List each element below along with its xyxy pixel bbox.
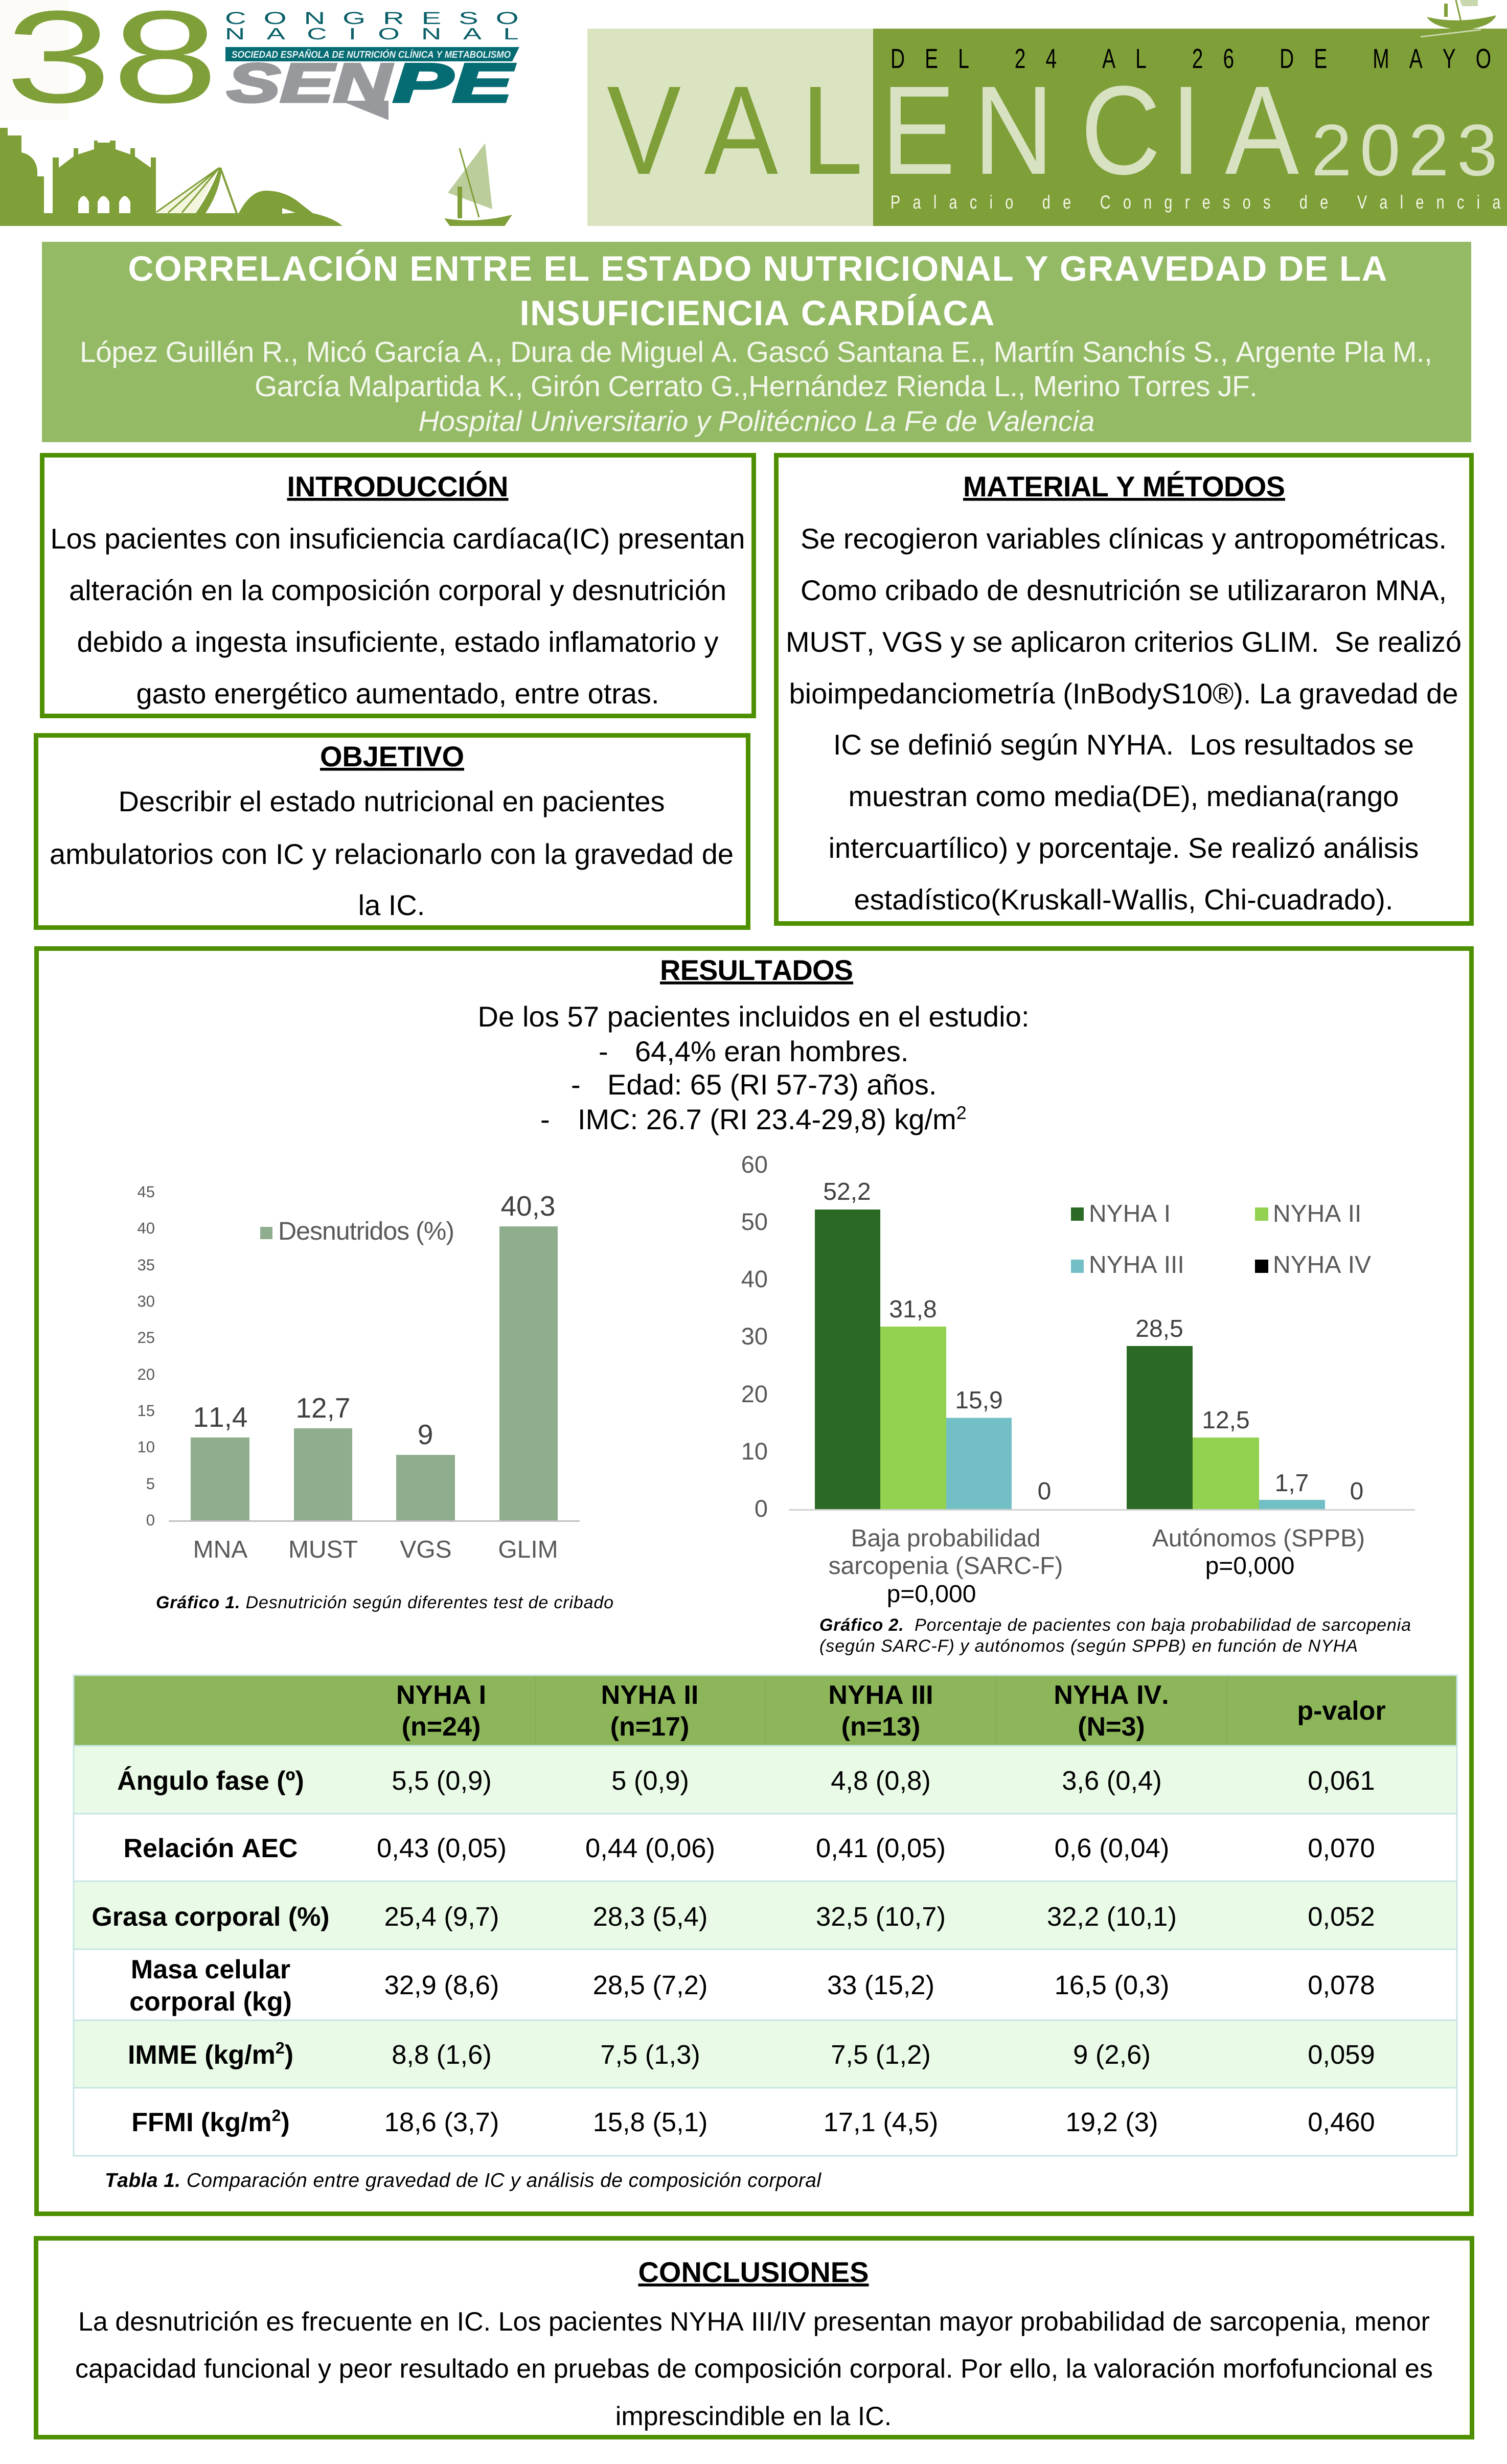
table: composición corporal [74, 1675, 1457, 2156]
row: FFMI: 17,1 (4,5) [824, 2107, 938, 2137]
caption: tabla 1: Tabla 1. Comparación entre gravedad de IC y análisis de composición corporal [105, 2170, 821, 2192]
row: masa celular: corporal (kg) [129, 1987, 292, 2017]
data labels: 28,5 [1135, 1315, 1183, 1342]
dark panel [873, 29, 1507, 226]
row: relación AEC: 0,44 (0,06) [585, 1833, 715, 1863]
y axis labels: 20 [741, 1380, 768, 1407]
row: FFMI: 19,2 (3) [1066, 2107, 1158, 2137]
row: grasa corporal: 32,2 (10,1) [1047, 1902, 1177, 1932]
row: FFMI: FFMI (kg/m [131, 2108, 272, 2137]
body text: intercuartílico) y porcentaje. Se realizó análisis [829, 832, 1419, 864]
data labels: 9 [418, 1419, 433, 1450]
y axis labels: 35 [138, 1256, 155, 1274]
header banner [0, 0, 1507, 226]
body text: muestran como media(DE), mediana(rango [849, 780, 1399, 812]
y axis labels [741, 1151, 768, 1522]
faint photo background [0, 0, 69, 120]
table header: (n=17) [610, 1712, 689, 1742]
row: IMME: 0,059 [1308, 2040, 1375, 2070]
row: IMME: ) [285, 2040, 293, 2070]
table header: NYHA III [828, 1680, 933, 1710]
body text: La desnutrición es frecuente en IC. Los pacientes NYHA III/IV presentan mayor probabilidad de sarcopenia, menor [78, 2307, 1430, 2337]
body text: IC se definió según NYHA. Los resultados se [833, 728, 1414, 761]
row: relación AEC: 0,6 (0,04) [1055, 1833, 1169, 1863]
row: IMME [128, 2039, 1375, 2070]
data labels: 31,8 [889, 1296, 937, 1323]
y axis labels: 25 [138, 1329, 155, 1347]
y axis labels: 20 [138, 1365, 155, 1383]
y axis labels: 45 [138, 1183, 155, 1201]
row: IMME: 7,5 (1,3) [600, 2040, 700, 2070]
heading: RESULTADOS [660, 954, 853, 986]
body text: MUST, VGS y se aplicaron criterios GLIM. Se realizó [786, 626, 1462, 658]
row: ángulo fase [117, 1766, 1375, 1796]
body text [50, 785, 734, 921]
y axis labels: 10 [138, 1438, 155, 1456]
row: masa celular [129, 1955, 1375, 2017]
table header: (n=24) [402, 1712, 481, 1742]
panel: objetivo [36, 735, 748, 927]
affiliation: Hospital Universitario y Politécnico La Fe de Valencia [418, 405, 1095, 437]
society ribbon [225, 47, 519, 61]
y axis labels: 5 [146, 1475, 155, 1493]
authors: López Guillén R., Micó García A., Dura de Miguel A. Gascó Santana E., Martín Sanchís S., Argente Pla M., [80, 336, 1432, 369]
caption: gráfico 2: Gráfico 2. Porcentaje de pacientes con baja probabilidad de sarcopenia [819, 1615, 1411, 1635]
row: masa celular: 32,9 (8,6) [384, 1970, 499, 2000]
authors: García Malpartida K., Girón Cerrato G.,Hernández Rienda L., Merino Torres JF. [255, 370, 1258, 403]
body text: la IC. [358, 889, 425, 921]
row: masa celular: 0,078 [1308, 1970, 1375, 2000]
summary text [477, 1000, 1030, 1135]
legend: NYHA IV [1273, 1251, 1371, 1279]
VALENCIA word: ENCIA [881, 60, 1299, 201]
heading: CONCLUSIONES [638, 2256, 869, 2288]
row: IMME: 9 (2,6) [1073, 2040, 1151, 2070]
row: IMME: IMME (kg/m [128, 2040, 276, 2070]
sailboat right [1421, 0, 1496, 37]
data labels: 0 [1350, 1478, 1363, 1505]
summary text: - [540, 1103, 550, 1135]
body text: alteración en la composición corporal y desnutrición [69, 574, 726, 606]
y axis labels: 40 [741, 1265, 768, 1292]
heading: OBJETIVO [320, 740, 464, 772]
body text: Describir el estado nutricional en pacientes [119, 785, 665, 817]
legend: Desnutridos (%) [278, 1217, 454, 1245]
data labels: 12,5 [1202, 1407, 1250, 1434]
row: IMME: 7,5 (1,2) [831, 2040, 931, 2070]
data labels: 0 [1038, 1478, 1051, 1505]
row backgrounds [74, 1746, 1457, 2088]
body text: debido a ingesta insuficiente, estado inflamatorio y [77, 626, 719, 658]
category labels: p=0,000 [887, 1581, 976, 1608]
summary text: Edad: 65 (RI 57-73) años. [607, 1068, 937, 1101]
legend: NYHA III [1089, 1251, 1184, 1279]
caption: gráfico 1: Gráfico 1. Desnutrición según diferentes test de cribado [156, 1593, 613, 1612]
body text: Se recogieron variables clínicas y antropométricas. [801, 522, 1447, 555]
row: IMME: 2 [276, 2039, 285, 2057]
row: grasa corporal: 32,5 (10,7) [816, 1902, 946, 1932]
body text [786, 522, 1462, 916]
row: relación AEC: 0,43 (0,05) [377, 1833, 507, 1863]
summary text: - [571, 1068, 581, 1101]
y axis labels [138, 1183, 155, 1529]
data labels: 40,3 [500, 1190, 556, 1222]
row: FFMI: 0,460 [1308, 2107, 1375, 2137]
category labels: MNA [193, 1536, 247, 1563]
category labels: Autónomos (SPPB) [1152, 1525, 1365, 1552]
body text: Los pacientes con insuficiencia cardíaca(IC) presentan [50, 522, 745, 555]
category labels [829, 1525, 1365, 1608]
bars [815, 1210, 1325, 1510]
VALENCIA word [607, 60, 1299, 201]
y axis labels: 0 [755, 1495, 768, 1522]
panel: resultados [37, 949, 1471, 2214]
row: masa celular: 16,5 (0,3) [1055, 1970, 1169, 2000]
body text: estadístico(Kruskall-Wallis, Chi-cuadrado). [854, 883, 1394, 916]
y axis labels: 30 [741, 1322, 768, 1350]
row: ángulo fase: 5,5 (0,9) [392, 1766, 492, 1796]
summary text: 2 [956, 1102, 967, 1123]
category labels: p=0,000 [1205, 1553, 1294, 1580]
row: relación AEC: 0,41 (0,05) [816, 1833, 946, 1863]
category labels: GLIM [498, 1536, 558, 1563]
SENPE logo: PE [393, 52, 515, 113]
body text [75, 2307, 1433, 2431]
panel: material y métodos [776, 455, 1471, 923]
summary text: De los 57 pacientes incluidos en el estudio: [477, 1000, 1030, 1033]
row: FFMI: ) [281, 2108, 290, 2137]
row: relación AEC [124, 1833, 1375, 1863]
y axis labels: 15 [138, 1402, 155, 1420]
data labels: 11,4 [193, 1401, 248, 1433]
title: CORRELACIÓN ENTRE EL ESTADO NUTRICIONAL Y GRAVEDAD DE LA [128, 249, 1387, 288]
congreso nacional wordmark: CONGRESO [225, 9, 519, 28]
row: FFMI: 2 [272, 2106, 281, 2125]
summary text: 64,4% eran hombres. [635, 1035, 908, 1067]
category labels: sarcopenia (SARC-F) [829, 1553, 1063, 1580]
category labels: VGS [400, 1536, 452, 1563]
category labels: MUST [288, 1536, 358, 1563]
panel: conclusiones [36, 2238, 1472, 2437]
row: ángulo fase: 4,8 (0,8) [831, 1766, 931, 1796]
table header: NYHA I [396, 1680, 486, 1710]
table header [74, 1675, 1457, 1746]
row: ángulo fase: 0,061 [1308, 1766, 1375, 1796]
body text: Como cribado de desnutrición se utilizararon MNA, [801, 574, 1447, 606]
row: FFMI: 15,8 (5,1) [593, 2107, 707, 2137]
row: ángulo fase: 5 (0,9) [611, 1766, 689, 1796]
category labels: Baja probabilidad [851, 1525, 1040, 1552]
row: FFMI: 18,6 (3,7) [384, 2107, 499, 2137]
row: masa celular: Masa celular [131, 1955, 290, 1984]
row: ángulo fase: 3,6 (0,4) [1062, 1766, 1162, 1796]
row: grasa corporal: 0,052 [1308, 1902, 1375, 1932]
table header: p-valor [1297, 1696, 1386, 1726]
row: grasa corporal [92, 1902, 1375, 1932]
data labels: 52,2 [823, 1178, 871, 1205]
row: masa celular: 33 (15,2) [827, 1970, 934, 2000]
legend [1071, 1200, 1371, 1279]
body text [50, 522, 745, 710]
congreso nacional wordmark [225, 9, 519, 43]
sailboat left [444, 143, 512, 226]
data labels [823, 1178, 1363, 1505]
title band [42, 242, 1471, 442]
row: relación AEC: Relación AEC [124, 1834, 298, 1863]
row: grasa corporal: Grasa corporal (%) [92, 1902, 330, 1932]
data labels [193, 1190, 556, 1450]
skyline of Valencia [0, 128, 342, 226]
bars [191, 1226, 558, 1521]
caption: gráfico 2: (según SARC-F) y autónomos (según SPPB) en función de NYHA [819, 1636, 1358, 1656]
data labels: 1,7 [1275, 1470, 1309, 1497]
SENPE logo [227, 52, 515, 120]
table header: (N=3) [1078, 1712, 1145, 1742]
title [128, 249, 1387, 333]
authors [80, 336, 1432, 403]
congreso nacional wordmark: NACIONAL [225, 25, 519, 43]
SENPE logo: SEN [227, 52, 393, 113]
title: INSUFICIENCIA CARDÍACA [519, 293, 995, 333]
y axis labels: 50 [741, 1208, 768, 1235]
VALENCIA word: VAL [607, 60, 863, 201]
summary text: IMC: 26.7 (RI 23.4-29,8) kg/m [578, 1103, 956, 1135]
table header: (n=13) [841, 1712, 920, 1742]
venue: Palacio de Congresos de Valencia [890, 192, 1501, 213]
row: FFMI [131, 2106, 1375, 2137]
y axis labels: 60 [741, 1151, 768, 1178]
row: relación AEC: 0,070 [1308, 1833, 1375, 1863]
year: 2023 [1311, 110, 1498, 191]
row: IMME: 8,8 (1,6) [392, 2040, 492, 2070]
y axis labels: 0 [146, 1511, 155, 1529]
light panel [587, 29, 873, 226]
body text: gasto energético aumentado, entre otras. [136, 677, 659, 710]
body text: bioimpedanciometría (InBodyS10®). La gravedad de [789, 677, 1458, 710]
heading: INTRODUCCIÓN [287, 470, 508, 503]
bar chart: sarcopenia y autonomía [741, 1151, 1415, 1608]
row: ángulo fase: Ángulo fase (º) [117, 1766, 304, 1796]
row: grasa corporal: 25,4 (9,7) [384, 1902, 499, 1932]
summary text: - [599, 1035, 608, 1067]
table header: NYHA IV. [1054, 1680, 1169, 1710]
y axis labels: 30 [138, 1292, 155, 1310]
row: masa celular: 28,5 (7,2) [593, 1970, 707, 2000]
panel: introducción [42, 455, 754, 716]
y axis labels: 40 [138, 1219, 155, 1237]
society ribbon: SOCIEDAD ESPAÑOLA DE NUTRICIÓN CLÍNICA Y METABOLISMO [232, 49, 511, 60]
row: grasa corporal: 28,3 (5,4) [593, 1902, 707, 1932]
body text: imprescindible en la IC. [615, 2402, 892, 2431]
body text: capacidad funcional y peor resultado en pruebas de composición corporal. Por ello, la valoración morfofuncional es [75, 2354, 1433, 2384]
body text: ambulatorios con IC y relacionarlo con la gravedad de [50, 838, 734, 870]
bar chart: desnutrición [138, 1183, 580, 1563]
data labels: 12,7 [295, 1392, 351, 1424]
category labels [193, 1536, 558, 1563]
y axis labels: 10 [741, 1438, 768, 1465]
dates: DEL 24 AL 26 DE MAYO [890, 43, 1491, 74]
data labels: 15,9 [955, 1387, 1003, 1414]
legend: NYHA II [1273, 1200, 1361, 1227]
caption: gráfico 2 [819, 1615, 1411, 1656]
heading: MATERIAL Y MÉTODOS [963, 470, 1285, 503]
legend: NYHA I [1089, 1200, 1171, 1227]
table header: NYHA II [601, 1680, 698, 1710]
